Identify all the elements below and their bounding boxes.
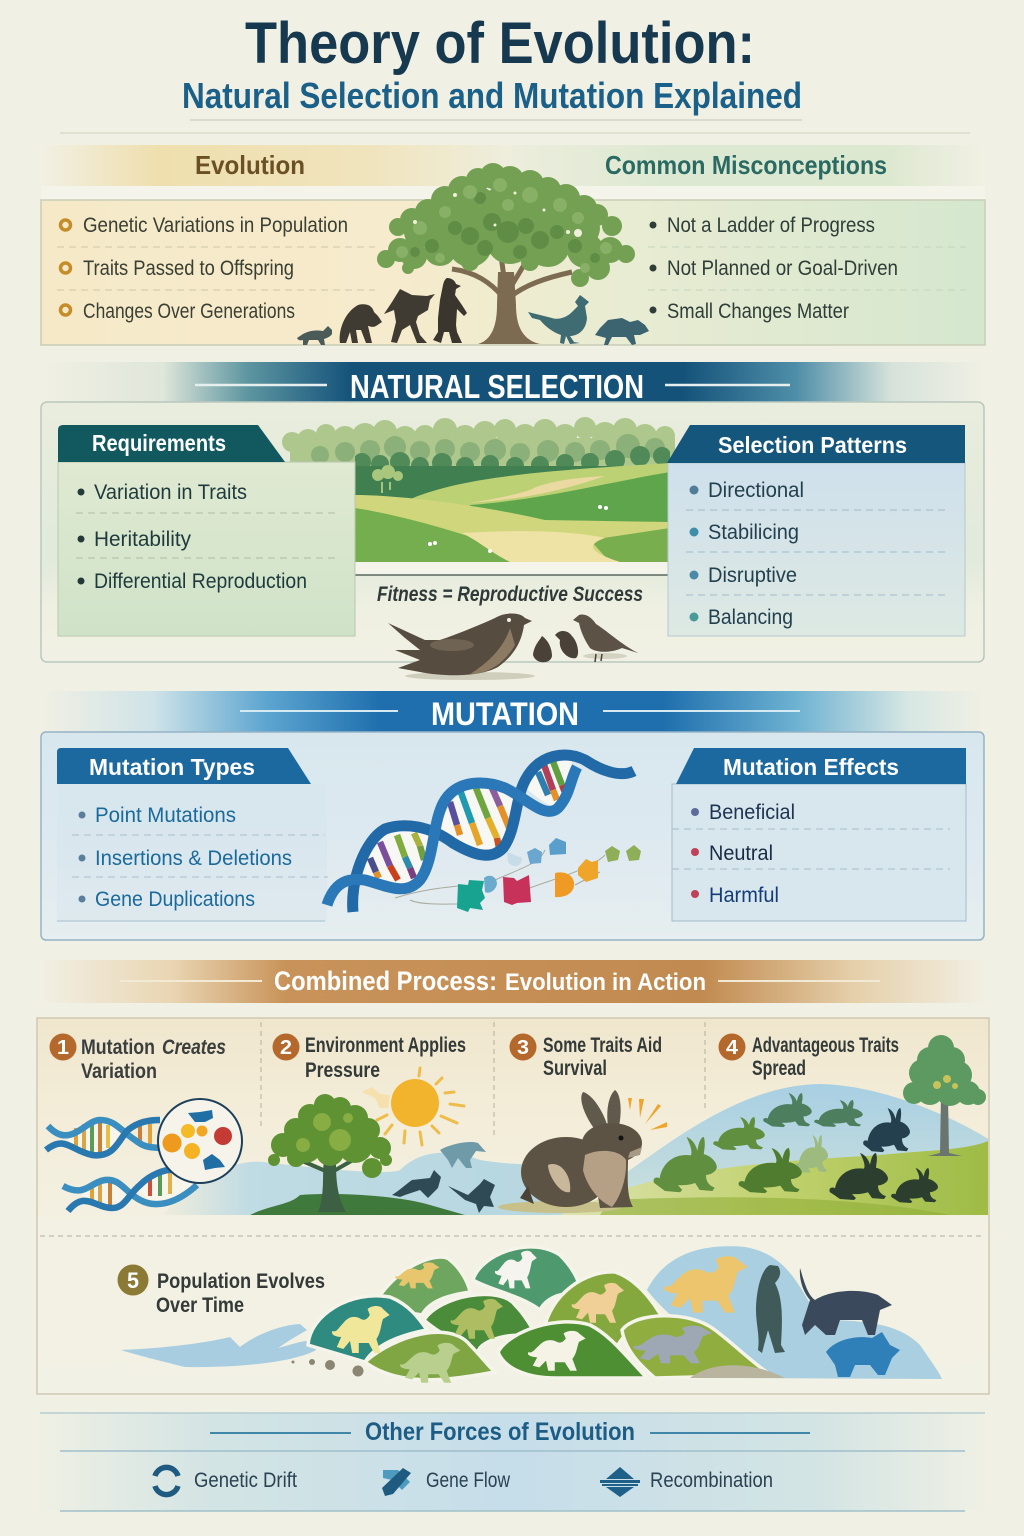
subtitle: Natural Selection and Mutation Explained <box>182 75 802 116</box>
step 3: some traits aid survival: Survival <box>543 1057 607 1080</box>
icon: sun <box>362 1068 464 1145</box>
step 2: environment applies pressure <box>268 1034 495 1213</box>
step 1: mutation creates variation: 1 <box>57 1037 69 1059</box>
icon: tree <box>377 163 635 344</box>
list: misconceptions <box>648 214 966 323</box>
icon: genetic drift <box>155 1467 178 1495</box>
label: gene flow: Gene Flow <box>426 1469 511 1492</box>
step 1: mutation creates variation: Creates <box>162 1036 226 1059</box>
icon: DNA strands with magnifier <box>46 1099 242 1211</box>
box: mutation types: Mutation Types <box>89 754 255 780</box>
label: genetic drift: Genetic Drift <box>194 1469 297 1492</box>
box: mutation effects: Neutral <box>709 842 773 865</box>
box: requirements <box>58 425 355 636</box>
arrow: swoosh <box>121 1324 316 1367</box>
box: selection patterns: Selection Patterns <box>718 432 907 458</box>
step 3: some traits aid survival: 3 <box>517 1037 529 1059</box>
step 2: environment applies pressure: 2 <box>280 1037 292 1059</box>
heading band: Common Misconceptions: Common Misconceptions <box>605 150 887 180</box>
illustration: meadow landscape <box>282 417 675 575</box>
heading: other forces: Other Forces of Evolution <box>365 1418 635 1446</box>
title: Theory of Evolution: <box>245 11 755 76</box>
heading band: Common Misconceptions <box>500 145 985 186</box>
list: evolution points: Genetic Variations in Population <box>83 214 348 237</box>
step 4: advantageous traits spread: 4 <box>726 1037 739 1059</box>
box: mutation effects <box>672 748 966 921</box>
step 5: population evolves over time: Over Time <box>156 1294 244 1317</box>
icon: tree <box>903 1035 986 1156</box>
list: evolution points: Changes Over Generations <box>83 300 295 323</box>
formula: fitness: Fitness = Reproductive Success <box>377 583 643 606</box>
icon: tree <box>268 1094 392 1212</box>
step 1: mutation creates variation <box>46 1034 242 1211</box>
step 1: mutation creates variation: Variation <box>81 1060 157 1083</box>
icon: evolving population hills <box>308 1246 942 1383</box>
heading band: Combined Process: Combined Process: <box>274 966 497 996</box>
step 5: population evolves over time: 5 <box>127 1268 139 1293</box>
icon: evolution silhouettes <box>297 278 649 345</box>
step 2: environment applies pressure: Environment Applies <box>305 1034 466 1057</box>
box: mutation types: Point Mutations <box>95 804 236 827</box>
box: selection patterns <box>667 425 965 636</box>
icon: recombination <box>600 1467 640 1497</box>
step 5: population evolves over time: Population Evolves <box>157 1270 325 1293</box>
heading band: Mutation: MUTATION <box>431 696 579 732</box>
box: mutation effects: Mutation Effects <box>723 754 899 780</box>
box: selection patterns: Directional <box>708 479 804 502</box>
heading band: Mutation <box>40 691 985 735</box>
icon: birds <box>388 614 638 680</box>
step 2: environment applies pressure: Pressure <box>305 1059 380 1082</box>
step 5: population evolves over time <box>118 1246 942 1383</box>
box: requirements: Differential Reproduction <box>94 570 307 593</box>
box: mutation effects: Harmful <box>709 884 779 907</box>
icon: gene flow <box>382 1468 411 1496</box>
box: selection patterns: Stabilicing <box>708 521 799 544</box>
list: misconceptions: Not Planned or Goal-Driven <box>667 257 898 280</box>
box: mutation types <box>57 748 328 921</box>
box: requirements: Variation in Traits <box>94 481 247 504</box>
panel: other forces of evolution <box>40 1413 985 1511</box>
heading band: Natural Selection <box>40 362 985 408</box>
icon: big rabbit <box>498 1090 667 1213</box>
step 4: advantageous traits spread: Advantageous Traits <box>752 1034 899 1057</box>
heading band: Natural Selection: NATURAL SELECTION <box>350 368 644 405</box>
panel: natural selection <box>41 402 984 680</box>
list: misconceptions: Small Changes Matter <box>667 300 849 323</box>
heading band: Evolution: Evolution <box>195 150 305 180</box>
panel: combined process <box>37 1018 990 1394</box>
box: requirements: Heritability <box>94 528 191 551</box>
panel: evolution and misconceptions <box>40 145 985 345</box>
heading band: Combined Process <box>40 960 985 1003</box>
box: selection patterns: Disruptive <box>708 564 797 587</box>
heading band: Evolution <box>40 145 510 186</box>
panel: mutation <box>41 732 984 940</box>
box: mutation types: Gene Duplications <box>95 888 255 911</box>
box: requirements: Requirements <box>92 430 226 456</box>
list: evolution points: Traits Passed to Offspring <box>83 257 294 280</box>
icon: rabbit population <box>654 1093 938 1203</box>
step 3: some traits aid survival: Some Traits Aid <box>543 1034 662 1057</box>
list: evolution points <box>57 214 375 323</box>
step 4: advantageous traits spread: Spread <box>752 1057 806 1080</box>
step 1: mutation creates variation: Mutation <box>81 1036 155 1059</box>
step 4: advantageous traits spread <box>654 1034 986 1203</box>
list: misconceptions: Not a Ladder of Progress <box>667 214 875 237</box>
box: mutation types: Insertions & Deletions <box>95 847 292 870</box>
scene: landscape hills <box>163 1084 990 1215</box>
box: selection patterns: Balancing <box>708 606 793 629</box>
label: recombination: Recombination <box>650 1469 773 1492</box>
icon: pebbles <box>292 1359 364 1376</box>
heading band: Combined Process: Evolution in Action <box>505 969 706 996</box>
icon: DNA helix <box>327 755 641 912</box>
box: mutation effects: Beneficial <box>709 801 795 824</box>
step 3: some traits aid survival <box>498 1034 667 1213</box>
icon: animals under pressure <box>392 1142 495 1213</box>
